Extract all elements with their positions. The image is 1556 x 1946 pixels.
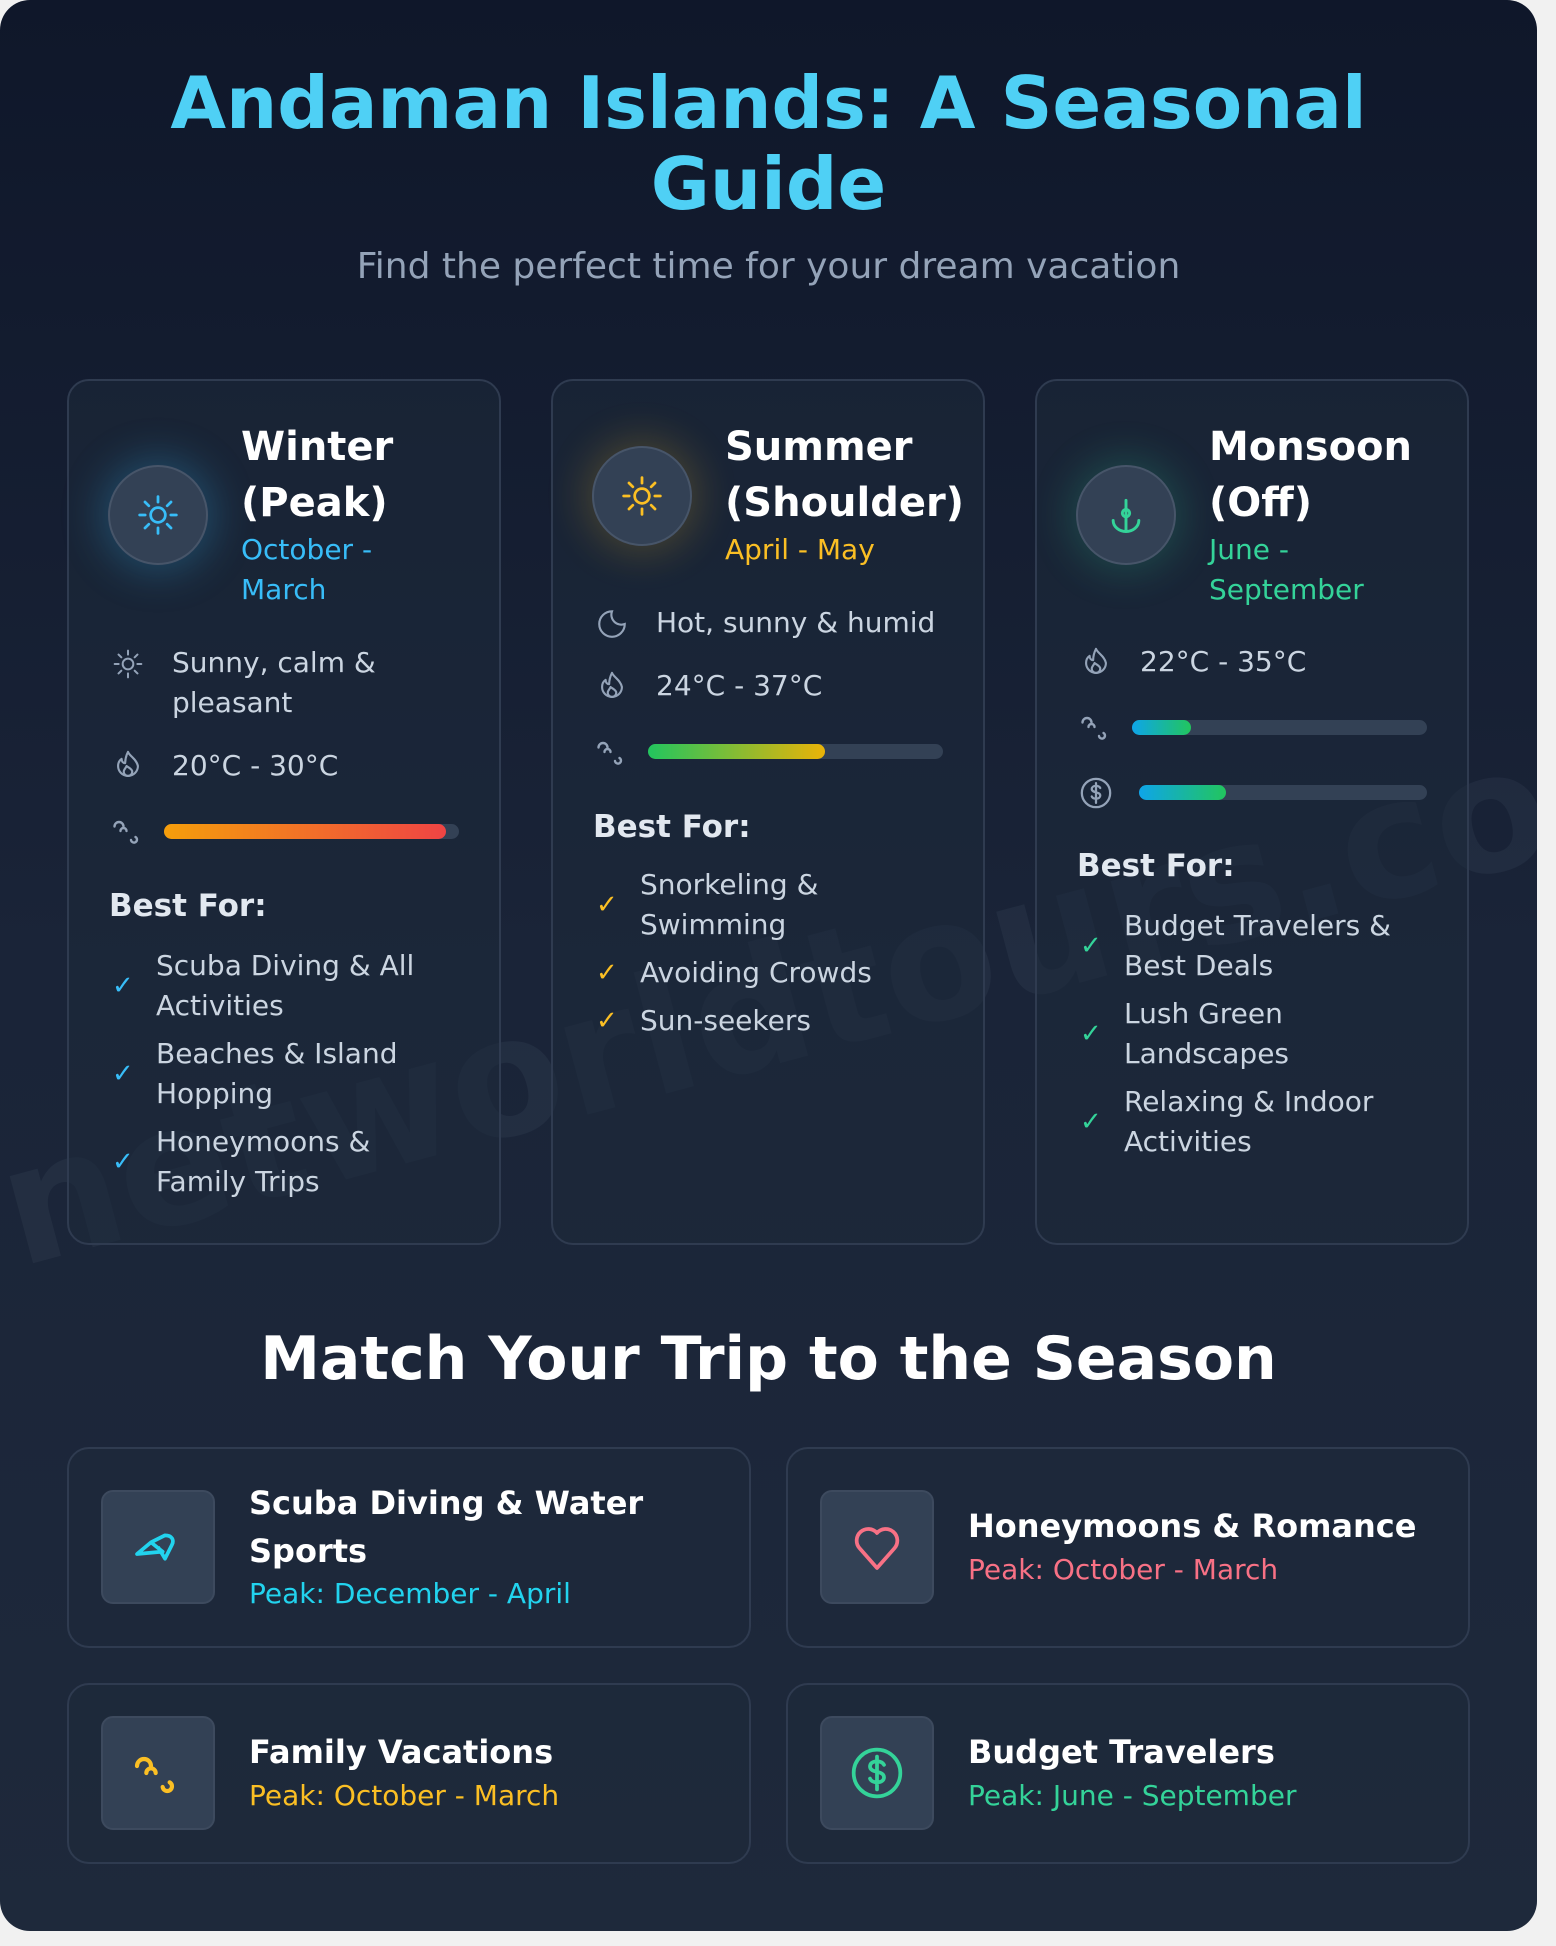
list: Activities bbox=[156, 989, 284, 1022]
title: Guide bbox=[651, 142, 886, 226]
icon: wind bbox=[597, 742, 622, 765]
weather text bbox=[172, 646, 376, 719]
title: Sports bbox=[249, 1532, 367, 1570]
list: ✓ bbox=[112, 1059, 134, 1089]
panel: monsoon bbox=[1035, 379, 1469, 1245]
bar: wind bbox=[1132, 720, 1427, 735]
title bbox=[170, 61, 1367, 226]
bar: temperature bbox=[164, 824, 459, 839]
icon: sun circle bbox=[108, 465, 208, 565]
list bbox=[1080, 909, 1391, 1158]
icon: anchor circle bbox=[1076, 465, 1176, 565]
icon: dollar bbox=[1080, 778, 1112, 808]
weather text: Hot, sunny & humid bbox=[656, 606, 935, 639]
list: Honeymoons & bbox=[156, 1125, 370, 1158]
heading bbox=[725, 424, 964, 526]
card: honeymoon bbox=[786, 1447, 1470, 1648]
card: budget bbox=[786, 1683, 1470, 1864]
bar: cost bbox=[1139, 785, 1427, 800]
weather text: Sunny, calm & bbox=[172, 646, 376, 679]
heading bbox=[1209, 424, 1412, 526]
date range: September bbox=[1209, 573, 1364, 606]
peak: Peak: June - September bbox=[968, 1779, 1296, 1812]
subtitle: Find the perfect time for your dream vacation bbox=[357, 246, 1180, 287]
heading: Monsoon bbox=[1209, 424, 1412, 470]
list: Lush Green bbox=[1124, 997, 1283, 1030]
date range: April - May bbox=[725, 533, 875, 566]
card: family bbox=[67, 1683, 751, 1864]
best for heading: Best For: bbox=[593, 809, 751, 845]
list: ✓ bbox=[1080, 1107, 1102, 1137]
list: Sun-seekers bbox=[640, 1004, 811, 1037]
list bbox=[112, 949, 414, 1198]
date range bbox=[1208, 533, 1364, 606]
peak: Peak: October - March bbox=[249, 1779, 559, 1812]
bar: temperature bbox=[648, 744, 943, 759]
icon: heart bbox=[820, 1490, 934, 1604]
heading: (Shoulder) bbox=[725, 480, 964, 526]
list: Relaxing & Indoor bbox=[1124, 1085, 1373, 1118]
list: Swimming bbox=[640, 908, 786, 941]
icon: flame bbox=[117, 750, 139, 777]
temperature: 24°C - 37°C bbox=[656, 669, 822, 702]
temperature: 20°C - 30°C bbox=[172, 749, 338, 782]
card: scuba bbox=[67, 1447, 751, 1648]
best for heading: Best For: bbox=[1077, 848, 1235, 884]
list: Scuba Diving & All bbox=[156, 949, 414, 982]
heading bbox=[241, 424, 394, 526]
icon: wind bbox=[101, 1716, 215, 1830]
best for heading: Best For: bbox=[109, 888, 267, 924]
temperature: 22°C - 35°C bbox=[1140, 645, 1306, 678]
list: Landscapes bbox=[1124, 1037, 1289, 1070]
list: Snorkeling & bbox=[640, 868, 818, 901]
panel: summer bbox=[551, 379, 985, 1245]
list: Best Deals bbox=[1124, 949, 1273, 982]
icon: wind bbox=[113, 820, 138, 844]
list bbox=[596, 868, 872, 1037]
icon: flame bbox=[1085, 648, 1107, 674]
heading: (Peak) bbox=[241, 480, 388, 526]
heading: Summer bbox=[725, 424, 912, 470]
list: Beaches & Island bbox=[156, 1037, 398, 1070]
icon: flame bbox=[601, 672, 623, 698]
title: Scuba Diving & Water bbox=[249, 1484, 643, 1522]
list: ✓ bbox=[112, 1147, 134, 1177]
title: Budget Travelers bbox=[968, 1733, 1275, 1771]
icon: sun circle bbox=[592, 446, 692, 546]
list: ✓ bbox=[1080, 931, 1102, 961]
list: Activities bbox=[1124, 1125, 1252, 1158]
icon: dollar bbox=[820, 1716, 934, 1830]
icon: wind bbox=[1081, 716, 1106, 740]
list: ✓ bbox=[112, 971, 134, 1001]
list: ✓ bbox=[1080, 1019, 1102, 1049]
list: ✓ bbox=[596, 890, 618, 920]
list: Budget Travelers & bbox=[1124, 909, 1391, 942]
heading: (Off) bbox=[1209, 480, 1312, 526]
date range: March bbox=[241, 573, 326, 606]
icon: fins bbox=[101, 1490, 215, 1604]
title: Honeymoons & Romance bbox=[968, 1507, 1416, 1545]
heading: Winter bbox=[241, 424, 393, 470]
date range: June - bbox=[1209, 533, 1289, 566]
peak: Peak: October - March bbox=[968, 1553, 1278, 1586]
section heading: Match Your Trip to the Season bbox=[260, 1324, 1277, 1394]
list: Hopping bbox=[156, 1077, 273, 1110]
list: Family Trips bbox=[156, 1165, 320, 1198]
list: ✓ bbox=[596, 958, 618, 988]
title bbox=[249, 1484, 644, 1570]
peak: Peak: December - April bbox=[249, 1577, 571, 1610]
weather text: pleasant bbox=[172, 686, 292, 719]
date range bbox=[241, 533, 372, 606]
date range: October - bbox=[241, 533, 372, 566]
icon: sun bbox=[114, 650, 142, 678]
list: ✓ bbox=[596, 1006, 618, 1036]
title: Andaman Islands: A Seasonal bbox=[170, 61, 1367, 145]
title: Family Vacations bbox=[249, 1733, 553, 1771]
panel: winter bbox=[67, 379, 501, 1245]
list: Avoiding Crowds bbox=[640, 956, 872, 989]
icon: moon bbox=[598, 610, 626, 638]
